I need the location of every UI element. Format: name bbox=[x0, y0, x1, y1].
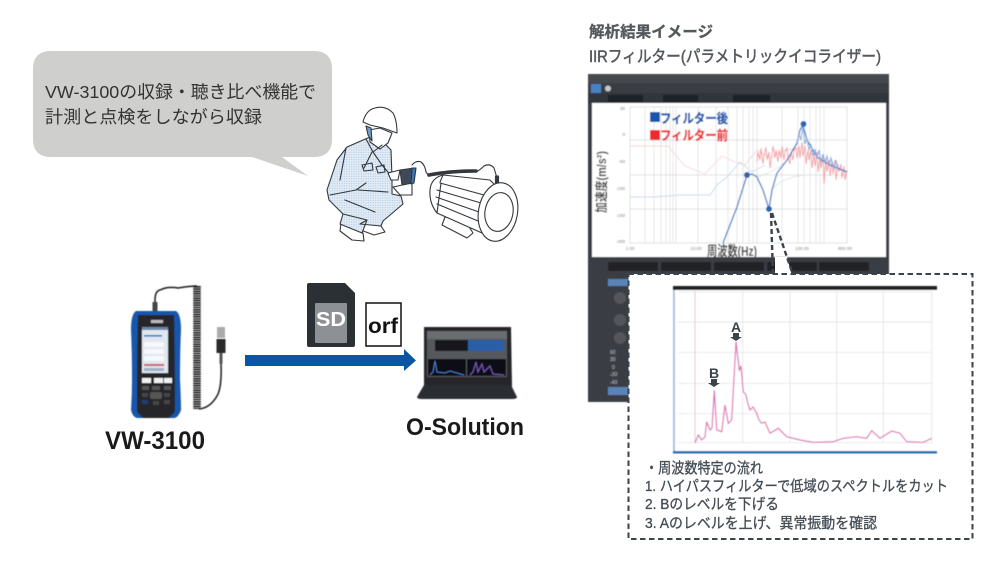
handheld device bbox=[400, 168, 414, 185]
x axis label: 周波数(Hz) bbox=[707, 243, 757, 259]
control column: 0 bbox=[612, 365, 615, 371]
connector: dashed zoom line bbox=[771, 213, 793, 276]
control column: -40 bbox=[610, 380, 617, 386]
axis ticks: -200 bbox=[616, 239, 625, 244]
arrow: transfer to PC bbox=[245, 349, 416, 371]
motor bbox=[430, 175, 522, 244]
spectrum line bbox=[695, 342, 932, 443]
file format box: orf bbox=[366, 303, 401, 346]
procedure text: 2. Bのレベルを下げる bbox=[645, 496, 779, 513]
procedure text bbox=[645, 460, 948, 532]
procedure text: 3. Aのレベルを上げ、異常振動を確認 bbox=[645, 515, 877, 532]
bubble text bbox=[45, 82, 316, 127]
y axis label: 加速度(m/s²) bbox=[594, 151, 609, 213]
probe bbox=[216, 327, 226, 364]
worker bbox=[327, 107, 412, 241]
device: VW-3100 with probe bbox=[131, 286, 226, 418]
blue curve: after filter bbox=[723, 125, 847, 243]
axis ticks: -150 bbox=[616, 213, 625, 218]
icon: SD card: SD bbox=[316, 309, 346, 331]
speech bubble bbox=[33, 51, 332, 176]
bubble text: 計測と点検をしながら収録 bbox=[45, 107, 263, 127]
axis ticks: -100 bbox=[616, 186, 625, 191]
buttons bbox=[142, 378, 172, 405]
legend: after filter: フィルター後 bbox=[660, 111, 728, 126]
illustration: inspector with motor bbox=[327, 107, 522, 244]
screen bbox=[142, 327, 168, 373]
axis ticks: 800.00 bbox=[838, 246, 852, 251]
axis ticks bbox=[616, 106, 852, 251]
control column bbox=[608, 279, 628, 395]
axis ticks: 1.00 bbox=[626, 246, 635, 251]
filter band selectors bbox=[608, 262, 869, 271]
spectrum grid bbox=[678, 291, 932, 443]
marker: B: B bbox=[709, 365, 719, 381]
procedure text: 1. ハイパスフィルターで低域のスペクトルをカット bbox=[645, 478, 948, 495]
bubble text: VW-3100の収録・聴き比べ機能で bbox=[45, 82, 316, 102]
marker: A bbox=[730, 319, 742, 341]
axis ticks: 10.00 bbox=[690, 246, 702, 251]
axis ticks: -50 bbox=[618, 159, 625, 164]
control column: 60 bbox=[610, 350, 616, 356]
cable bbox=[412, 161, 497, 178]
icon: SD card bbox=[307, 283, 355, 347]
legend: before filter: フィルター前 bbox=[660, 128, 728, 143]
filter points bbox=[744, 172, 750, 178]
red spectrum: before filter bbox=[757, 142, 847, 184]
panel: software screenshot bbox=[588, 74, 889, 402]
pale curves bbox=[630, 146, 800, 174]
label: VW-3100: VW-3100 bbox=[105, 427, 205, 455]
callout: frequency identification bbox=[628, 274, 972, 539]
axis ticks: 100.00 bbox=[795, 246, 809, 251]
file format box: orf: orf bbox=[368, 315, 399, 338]
marker: A: A bbox=[731, 319, 741, 335]
plot area bbox=[592, 103, 886, 259]
axis ticks: 30 bbox=[620, 106, 625, 111]
toolbar bbox=[588, 74, 889, 103]
marker: B bbox=[708, 365, 720, 387]
subheading: IIR filter: IIRフィルター(パラメトリックイコライザー) bbox=[589, 47, 881, 66]
axis ticks: 0 bbox=[622, 132, 625, 137]
heading: analysis result image: 解析結果イメージ bbox=[589, 22, 713, 41]
procedure text: ・周波数特定の流れ bbox=[645, 460, 763, 477]
coiled cable bbox=[155, 286, 221, 409]
spectrum chart bbox=[673, 286, 937, 454]
laptop bbox=[417, 327, 517, 399]
body bbox=[131, 311, 181, 418]
label: O-Solution: O-Solution bbox=[406, 414, 524, 441]
grid lines bbox=[630, 107, 847, 243]
control column: -30 bbox=[610, 372, 617, 378]
control column: 30 bbox=[610, 357, 616, 363]
